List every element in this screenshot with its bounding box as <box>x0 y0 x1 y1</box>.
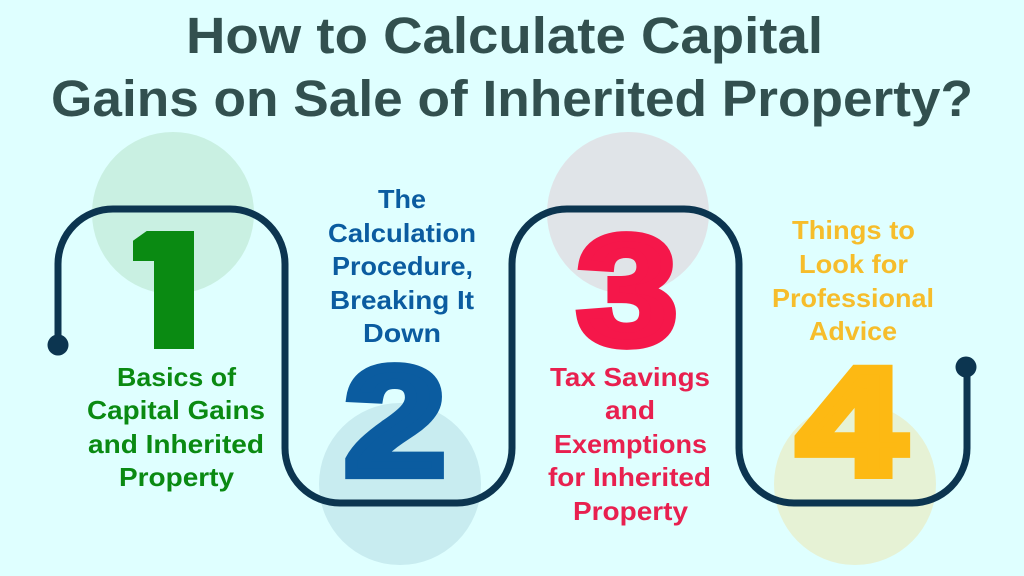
number 3: 3 <box>578 205 676 376</box>
panel: step 4 professional advice <box>772 215 936 565</box>
text: step 3 label: Property <box>573 496 689 526</box>
text: step 2 label: Down <box>363 318 441 348</box>
panel: step 1 basics of capital gains <box>87 132 265 492</box>
text: step 4 label: Things to <box>792 215 915 245</box>
panel: step 2 calculation procedure <box>319 184 481 565</box>
title: Gains on Sale of Inherited Property? <box>51 70 973 127</box>
text: step 1 label: Capital Gains <box>87 395 265 425</box>
text: step 3 label: Exemptions <box>554 429 707 459</box>
text: step 1 label: Property <box>119 462 235 492</box>
title: How to Calculate Capital <box>186 7 823 64</box>
text: step 1 label: and Inherited <box>88 429 264 459</box>
text: step 4 label: Look for <box>799 249 908 279</box>
text: step 4 label: Professional <box>772 283 934 313</box>
text: step 4 label: Advice <box>809 316 897 346</box>
text: step 3 label: for Inherited <box>548 462 711 492</box>
text: step 3 label <box>548 362 711 526</box>
text: step 2 label: Breaking It <box>330 285 474 315</box>
text: step 4 label <box>772 215 934 346</box>
text: step 2 label: Calculation <box>328 218 476 248</box>
number 1: 1 <box>129 204 217 398</box>
circle: step 4 background <box>774 403 936 565</box>
text: step 1 label <box>87 362 265 492</box>
number 2: 2 <box>345 337 445 507</box>
number 4: 4 <box>798 336 905 506</box>
circle: step 2 background <box>319 403 481 565</box>
circle: step 1 background <box>92 132 254 294</box>
circle: step 3 background <box>547 132 709 294</box>
text: step 2 label: The <box>378 184 426 214</box>
title <box>51 7 973 127</box>
text: step 1 label: Basics of <box>117 362 236 392</box>
text: step 2 label: Procedure, <box>332 251 473 281</box>
text: step 3 label: and <box>605 395 655 425</box>
text: step 2 label <box>328 184 476 348</box>
winding path connector with end dots <box>48 209 976 503</box>
panel: step 3 tax savings and exemptions <box>547 132 711 526</box>
text: step 3 label: Tax Savings <box>550 362 710 392</box>
